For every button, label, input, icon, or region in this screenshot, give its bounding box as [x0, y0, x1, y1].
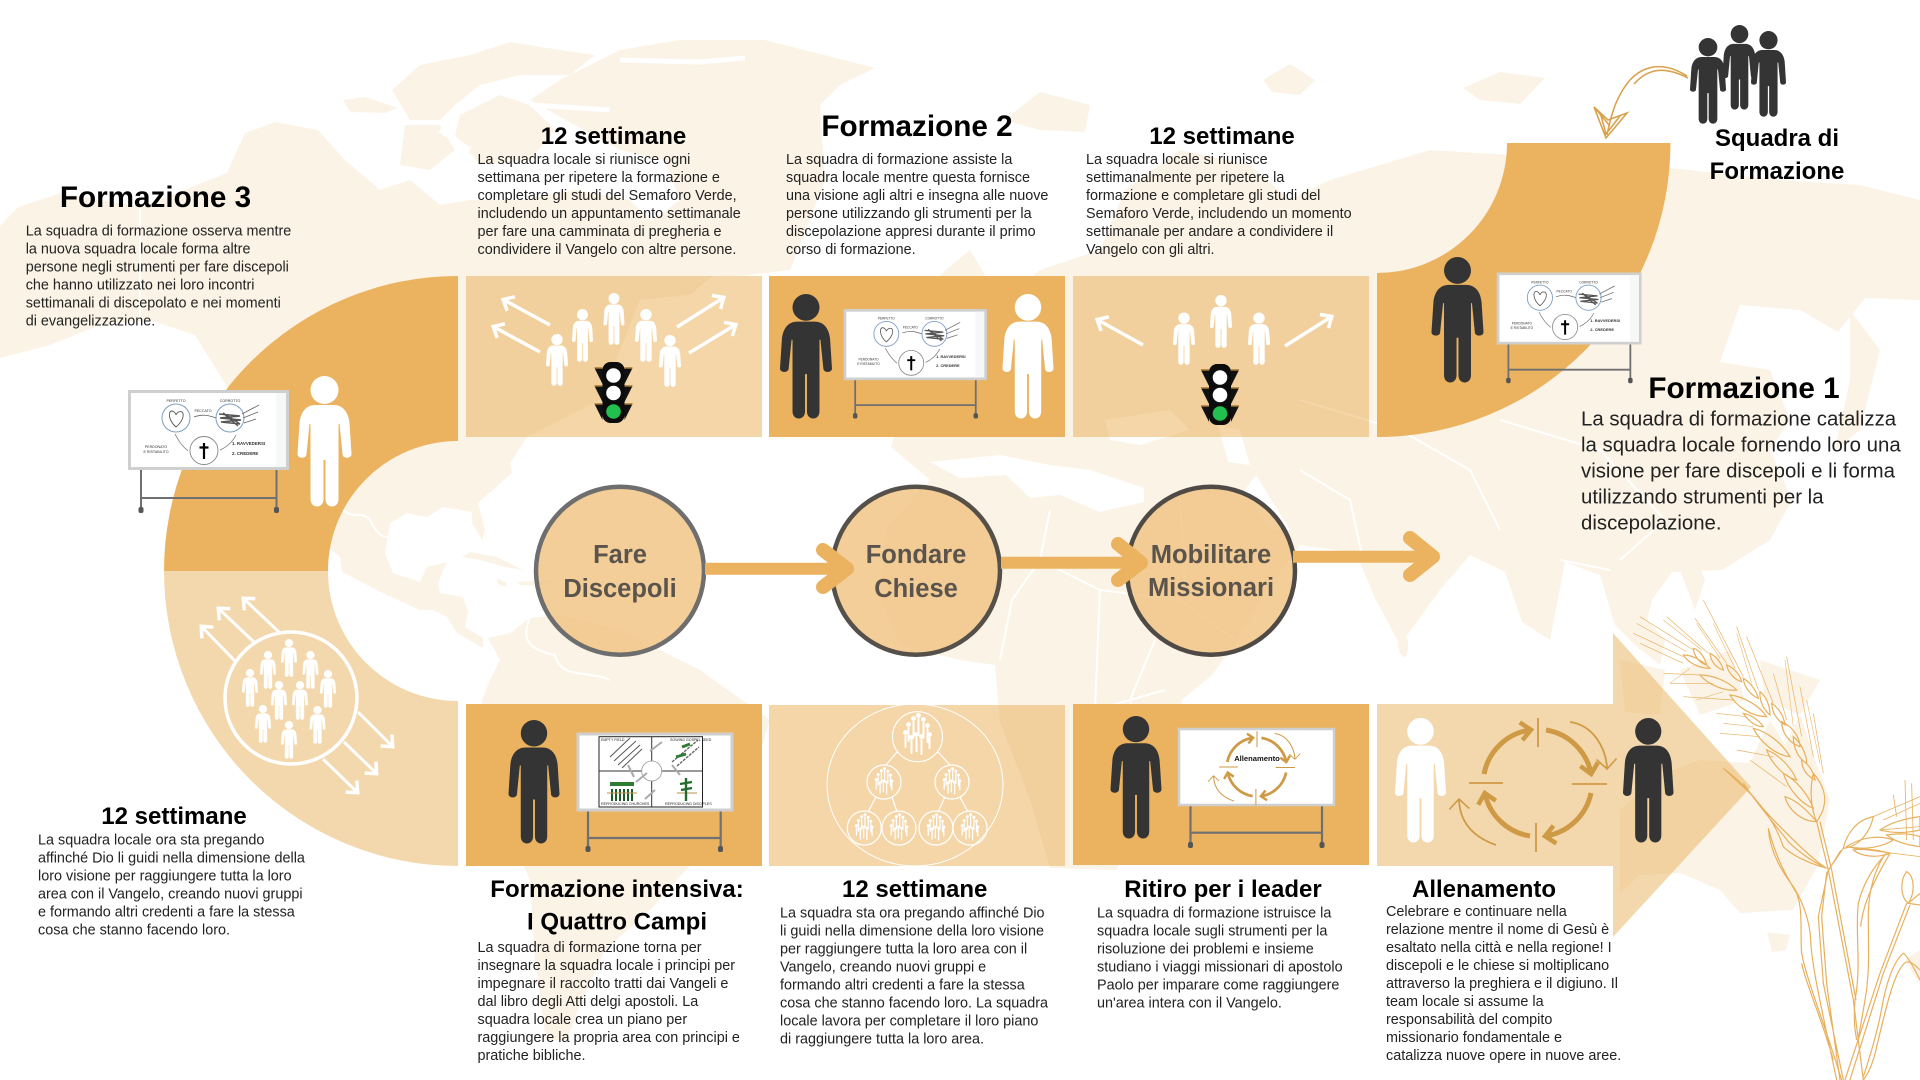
heading: 12 settimane left: 12 settimane: [101, 803, 247, 830]
text: Formazione intensiva: dal libro degli Atti delgi apostoli. La: [478, 994, 698, 1010]
text: Formazione 1: utilizzando strumenti per la: [1581, 486, 1824, 508]
heading: Ritiro per i leader: Ritiro per i leader: [1124, 876, 1322, 903]
icon: whiteboard three circles left: 1. RAVVEDERSI: [232, 441, 265, 446]
text: 12 settimane top 2: Semaforo Verde, includendo un momento: [1086, 206, 1352, 222]
text: 12 settimane bottom: La squadra sta ora pregando affinché Dio: [780, 906, 1045, 922]
text: 12 settimane bottom: locale lavora per completare il loro piano: [780, 1014, 1038, 1030]
arrow: missionari onward: [1293, 538, 1433, 575]
text: Formazione 1: la squadra locale fornendo loro una: [1581, 434, 1901, 456]
icon: trainers and board top 2: CORROTTO: [925, 317, 944, 321]
heading: Allenamento: Allenamento: [1412, 876, 1556, 903]
icon: crowd with arrows: [202, 599, 392, 792]
heading: 12 settimane top 2: 12 settimane: [1149, 123, 1295, 150]
text: Formazione 1: visione per fare discepoli e li forma: [1581, 460, 1896, 482]
icon: trainer and board right: PERFETTO: [1531, 280, 1549, 284]
text: Formazione 2: La squadra di formazione assiste la: [786, 152, 1012, 168]
text: Allenamento: Celebrare e continuare nella: [1386, 904, 1567, 920]
step: Fondare Chiese: Fondare: [866, 541, 966, 569]
text: 12 settimane left: e formando altri credenti a fare la stessa: [38, 905, 295, 921]
text: Formazione 1: discepolazione.: [1581, 512, 1722, 534]
icon: person and coaching board: [1110, 716, 1334, 848]
icon: person and coaching board: Allenamento: [1234, 754, 1280, 763]
heading: Squadra di Formazione: Formazione: [1710, 158, 1844, 185]
text: 12 settimane top 2: Vangelo con gli altri.: [1086, 242, 1215, 258]
icon: person and four fields board: REPRODUCING DISCIPLES: [665, 802, 712, 806]
text: Allenamento: discepoli e le chiese si moltiplicano: [1386, 958, 1609, 974]
step: Fare Discepoli: [536, 487, 704, 655]
text: Formazione 2: corso di formazione.: [786, 242, 916, 258]
icon: whiteboard three circles left: CORROTTO: [220, 399, 240, 403]
text: 12 settimane top 2: La squadra locale si riunisce: [1086, 152, 1268, 168]
icon: person and four fields board: SOWING GOSPEL SEED: [670, 738, 712, 742]
arrow: team to path: [1594, 67, 1688, 138]
panel: top 3: [1073, 276, 1369, 437]
text: Formazione 3: di evangelizzazione.: [26, 314, 155, 330]
icon: trainers and board top 2: 2. CREDERE: [936, 363, 960, 368]
icon: trainers and board top 2: PECCATO: [903, 326, 918, 330]
text: Ritiro per i leader: studiano i viaggi missionari di apostolo: [1097, 960, 1343, 976]
heading: Formazione intensiva: Formazione intensiva:: [490, 876, 744, 903]
icon: person and four fields board: REPRODUCING CHURCHES: [601, 802, 650, 806]
text: Allenamento: team locale si assume la: [1386, 994, 1544, 1010]
text: 12 settimane bottom: di raggiungere tutta la loro area.: [780, 1032, 984, 1048]
text: Formazione intensiva: La squadra di formazione torna per: [478, 940, 702, 956]
heading: Formazione 3: Formazione 3: [60, 181, 251, 214]
text: 12 settimane left: La squadra locale ora sta pregando: [38, 833, 264, 849]
heading: Formazione 2: Formazione 2: [821, 110, 1013, 143]
panel: top 1: [466, 276, 762, 437]
text: 12 settimane top 1: completare gli studi del Semaforo Verde,: [478, 188, 737, 204]
text: 12 settimane left: cosa che stanno facendo loro.: [38, 923, 230, 939]
text: Formazione intensiva: impegnare il raccolto tratti dai Vangeli e: [478, 976, 728, 992]
panel: bottom 1: [466, 704, 762, 866]
text: Ritiro per i leader: La squadra di formazione istruisce la: [1097, 906, 1331, 922]
text: Ritiro per i leader: un'area intera con il Vangelo.: [1097, 996, 1282, 1012]
heading: 12 settimane bottom: 12 settimane: [842, 876, 987, 903]
text: Ritiro per i leader: squadra locale sugli strumenti per la: [1097, 924, 1327, 940]
icon: trainers and board top 2: PERFETTO: [878, 317, 895, 321]
text: Allenamento: missionario fondamentale e: [1386, 1030, 1562, 1046]
text: Allenamento: relazione mentre il nome di Gesù è: [1386, 922, 1609, 938]
text: Formazione intensiva: raggiungere la propria area con principi e: [478, 1030, 740, 1046]
step: Mobilitare Missionari: [1127, 487, 1295, 655]
text: Ritiro per i leader: risoluzione dei problemi e insieme: [1097, 942, 1314, 958]
panel: top 2: [769, 276, 1065, 437]
icon: whiteboard three circles left: 2. CREDERE: [232, 451, 258, 456]
heading: Formazione intensiva: I Quattro Campi: [527, 908, 707, 936]
icon: trainer and board right: 1. RAVVEDERSI: [1590, 318, 1620, 323]
text: 12 settimane left: area con il Vangelo, creando nuovi gruppi: [38, 887, 303, 903]
process path: curved band left, upper half: [164, 276, 458, 571]
text: 12 settimane bottom: formando altri credenti a fare la stessa: [780, 978, 1025, 994]
panel: bottom 2: [769, 705, 1065, 866]
heading: Squadra di Formazione: Squadra di: [1715, 125, 1839, 152]
text: Formazione 3: che hanno utilizzato nei loro incontri: [26, 278, 254, 294]
icon: trainer and board right: E RISTABILITO: [1511, 326, 1534, 330]
text: Allenamento: catalizza nuove opere in nuove aree.: [1386, 1048, 1621, 1064]
panel: bottom 3: [1073, 704, 1369, 865]
icon: trainer and board right: [1432, 257, 1640, 383]
icon: whiteboard three circles left: PERDONATO: [145, 445, 167, 449]
text: 12 settimane left: affinché Dio li guidi nella dimensione della: [38, 851, 305, 867]
arrow: chiese to missionari: [1001, 544, 1141, 580]
icon: trainer and board right: CORROTTO: [1579, 280, 1598, 284]
icon: sending group top 1: [494, 293, 735, 423]
step: Fare Discepoli: Fare: [593, 541, 647, 569]
text: 12 settimane bottom: per raggiungere tutta la loro area con il: [780, 942, 1027, 958]
step: Mobilitare Missionari: Mobilitare: [1151, 541, 1271, 569]
text: Formazione 3: settimanali di discepolato e nei momenti: [26, 296, 281, 312]
process path: curved band left, lower half: [164, 571, 458, 866]
icon: trainer and board right: 2. CREDERE: [1590, 327, 1614, 332]
text: Formazione 2: squadra locale mentre questa fornisce: [786, 170, 1030, 186]
icon: sending group top 3: [1098, 295, 1331, 425]
icon: training team: [1690, 25, 1786, 124]
text: 12 settimane bottom: Vangelo, creando nuovi gruppi e: [780, 960, 986, 976]
text: 12 settimane top 1: condividere il Vangelo con altre persone.: [478, 242, 736, 258]
text: 12 settimane top 1: settimana per ripetere la formazione e: [478, 170, 720, 186]
icon: trainers and board top 2: E RISTABILITO: [857, 362, 880, 366]
text: Allenamento: esaltato nella città e nella regione! I: [1386, 940, 1612, 956]
icon: wheat: [1633, 600, 1920, 1080]
icon: multiplying groups network: [827, 704, 1003, 866]
icon: trainer and board right: PERDONATO: [1512, 322, 1532, 326]
text: Formazione intensiva: pratiche bibliche.: [478, 1048, 586, 1064]
text: Formazione 3: persone negli strumenti per fare discepoli: [26, 260, 289, 276]
text: Formazione 3: la nuova squadra locale forma altre: [26, 242, 250, 258]
text: 12 settimane top 2: settimanale per andare a condividere il: [1086, 224, 1333, 240]
text: 12 settimane left: loro visione per raggiungere tutta la loro: [38, 869, 292, 885]
icon: person and four fields board: EMPTY FIELD: [601, 738, 625, 742]
text: 12 settimane top 1: La squadra locale si riunisce ogni: [478, 152, 690, 168]
icon: whiteboard three circles left: PECCATO: [194, 409, 212, 413]
text: Formazione 1: La squadra di formazione catalizza: [1581, 408, 1897, 430]
text: 12 settimane bottom: li guidi nella dimensione della loro visione: [780, 924, 1044, 940]
process path: curved band top right: [1377, 143, 1670, 437]
icon: person and four fields board: [508, 720, 732, 852]
step: Fondare Chiese: [832, 487, 1000, 655]
heading: 12 settimane top 1: 12 settimane: [541, 123, 686, 150]
icon: traffic light: [594, 362, 632, 423]
text: Formazione 3: La squadra di formazione osserva mentre: [26, 224, 291, 240]
icon: white person left band: [298, 376, 352, 506]
heading: Formazione 1: Formazione 1: [1648, 372, 1840, 405]
text: Allenamento: attraverso la preghiera e il digiuno. Il: [1386, 976, 1618, 992]
text: 12 settimane bottom: cosa che stanno facendo loro. La squadra: [780, 996, 1048, 1012]
step: Fare Discepoli: Discepoli: [563, 575, 677, 603]
text: 12 settimane top 1: per fare una camminata di pregheria e: [478, 224, 721, 240]
text: Formazione 2: una visione agli altri e insegna alle nuove: [786, 188, 1048, 204]
text: Formazione 2: discepolazione appresi durante il primo: [786, 224, 1036, 240]
icon: trainers and board top 2: [780, 294, 1054, 419]
step: Fondare Chiese: Chiese: [874, 575, 958, 603]
icon: whiteboard three circles left: E RISTABILITO: [143, 450, 169, 454]
icon: traffic light: [1201, 364, 1239, 425]
text: 12 settimane top 1: includendo un appuntamento settimanale: [478, 206, 741, 222]
icon: trainers and board top 2: 1. RAVVEDERSI: [936, 354, 966, 359]
icon: whiteboard three circles left: PERFETTO: [166, 399, 186, 403]
icon: coaching cycle with two people: [1395, 718, 1674, 852]
icon: whiteboard three circles left: [130, 392, 288, 513]
text: Formazione 2: persone utilizzando gli strumenti per la: [786, 206, 1032, 222]
text: Formazione intensiva: insegnare la squadra locale i principi per: [478, 958, 735, 974]
icon: trainers and board top 2: PERDONATO: [859, 358, 879, 362]
step: Mobilitare Missionari: Missionari: [1148, 574, 1274, 602]
icon: trainer and board right: PECCATO: [1557, 289, 1572, 293]
text: Allenamento: responsabilità del compito: [1386, 1012, 1552, 1028]
text: 12 settimane top 2: formazione e completare gli studi del: [1086, 188, 1320, 204]
text: Formazione intensiva: squadra locale crea un piano per: [478, 1012, 687, 1028]
text: 12 settimane top 2: settimanalmente per ripetere la: [1086, 170, 1284, 186]
text: Ritiro per i leader: Paolo per imparare come raggiungere: [1097, 978, 1339, 994]
panel: bottom 4 big arrow: [1377, 633, 1751, 937]
arrow: discepoli to chiese: [705, 550, 847, 587]
